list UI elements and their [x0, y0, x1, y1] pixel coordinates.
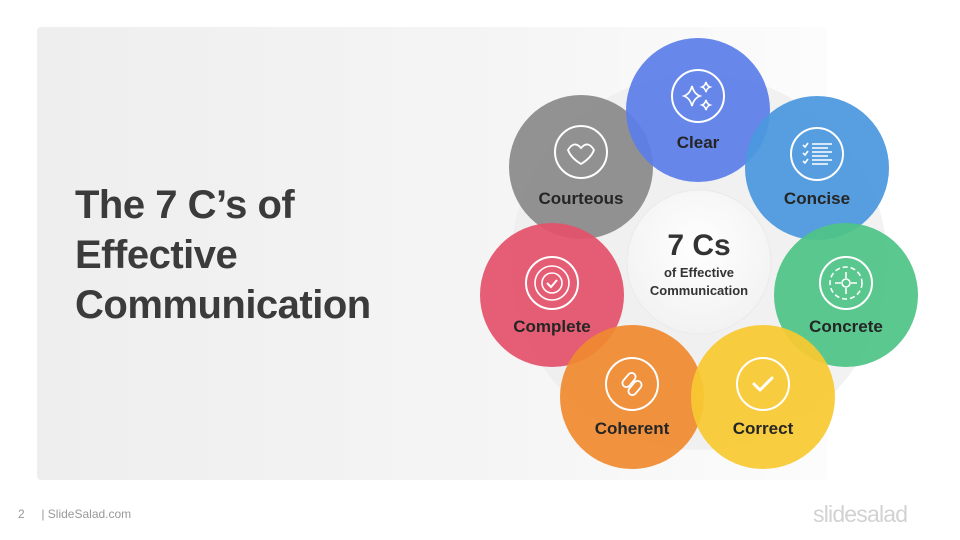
circle: Concise [745, 96, 889, 240]
circle: Coherent: Coherent [595, 419, 670, 438]
circle: Clear: Clear [677, 133, 720, 152]
center circle: Communication [650, 283, 748, 298]
center circle: 7 Cs [667, 229, 731, 262]
title: Communication [75, 283, 371, 327]
circle: Complete: Complete [513, 317, 591, 336]
circle: Complete [480, 223, 624, 367]
title [75, 183, 371, 327]
center circle [627, 190, 771, 334]
circle: Courteous: Courteous [538, 189, 624, 208]
logo: slidesalad [813, 501, 907, 527]
circle: Concise: Concise [784, 189, 850, 208]
footer: 2 | SlideSalad.com [18, 507, 131, 521]
circle: Clear [626, 38, 770, 182]
circle: Courteous [509, 95, 653, 239]
circle: Correct [691, 325, 835, 469]
title: Effective [75, 233, 237, 277]
circle: Coherent [560, 325, 704, 469]
circle: Concrete [774, 223, 918, 367]
center circle: of Effective [664, 265, 734, 280]
circle: Concrete: Concrete [809, 317, 883, 336]
circle: Correct: Correct [733, 419, 794, 438]
title: The 7 C’s of [75, 183, 294, 227]
